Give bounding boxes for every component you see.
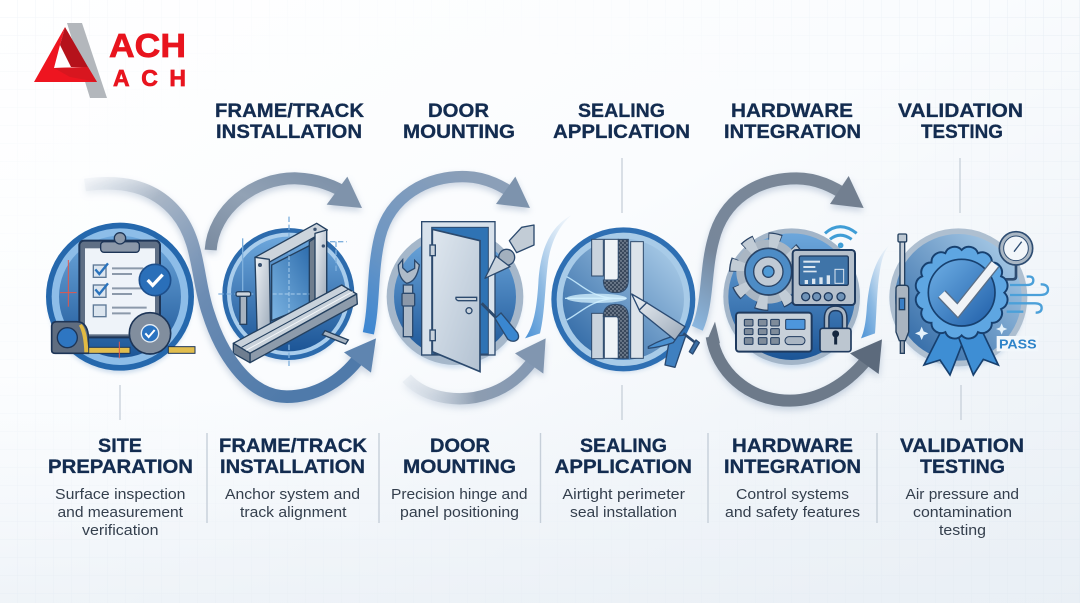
- description: contamination: [913, 505, 1012, 521]
- door frame: [422, 222, 495, 355]
- icon: frame and track: [218, 217, 357, 368]
- description: Surface inspection: [55, 487, 186, 503]
- arrow: frame top: [211, 177, 362, 250]
- heading: sealing application: SEALING: [578, 100, 665, 122]
- heading: sealing application: APPLICATION: [553, 121, 690, 143]
- heading: hardware integration: HARDWARE: [731, 100, 853, 122]
- column: validation testing: [900, 435, 1024, 539]
- heading: SITE: [98, 435, 142, 457]
- heading: [48, 435, 193, 478]
- heading: DOOR: [430, 435, 490, 457]
- icon: site preparation: [46, 223, 195, 373]
- logo: [34, 23, 186, 98]
- drill: [485, 225, 534, 278]
- probe: [896, 234, 909, 353]
- track: [233, 285, 357, 363]
- sealing channel: [592, 239, 643, 359]
- sparkles: [915, 323, 1007, 340]
- heading: MOUNTING: [403, 456, 516, 478]
- column: door mounting: [391, 435, 528, 521]
- airflow lines: [1007, 276, 1048, 313]
- description: [562, 487, 685, 521]
- heading: [554, 435, 692, 478]
- pass label: PASS: [999, 337, 1037, 352]
- arrow: frame to door: [368, 177, 530, 333]
- heading: validation testing: [898, 100, 1023, 143]
- logo wordmark: [109, 27, 186, 91]
- icon: hardware integration: [723, 227, 860, 368]
- control panel: [793, 250, 855, 305]
- swoosh: door to sealing: [525, 215, 572, 338]
- description: testing: [939, 523, 986, 539]
- description: verification: [82, 523, 158, 539]
- heading: validation testing: TESTING: [921, 121, 1003, 143]
- heading: door mounting: [403, 100, 515, 143]
- heading: door mounting: DOOR: [428, 100, 489, 122]
- heading: HARDWARE: [732, 435, 853, 457]
- airflow: [565, 277, 627, 320]
- heading: APPLICATION: [554, 456, 692, 478]
- swoosh: hardware to validation: [861, 245, 889, 338]
- description: and measurement: [58, 505, 183, 521]
- heading: FRAME/TRACK: [219, 435, 367, 457]
- description: track alignment: [240, 505, 346, 521]
- door panel: [432, 229, 480, 372]
- description: [225, 487, 360, 521]
- ribbons: [924, 330, 998, 375]
- arrow: door bottom: [407, 338, 546, 399]
- icon: validation testing: [889, 228, 1048, 375]
- column: frame/track installation: [219, 435, 367, 521]
- heading: frame/track: FRAME/TRACK: [215, 100, 364, 122]
- column dividers: [207, 433, 877, 523]
- description: seal installation: [570, 505, 677, 521]
- column: sealing application: [554, 435, 692, 521]
- heading: INSTALLATION: [220, 456, 365, 478]
- description: [391, 487, 528, 521]
- heading: [900, 435, 1024, 478]
- description: panel positioning: [400, 505, 519, 521]
- column: site preparation: [48, 435, 193, 539]
- top headings: [215, 100, 1023, 143]
- heading: validation testing: VALIDATION: [898, 100, 1023, 122]
- description: [55, 487, 186, 539]
- description: [906, 487, 1019, 539]
- bolts: [236, 292, 348, 344]
- padlock: [820, 308, 851, 352]
- heading: door mounting: MOUNTING: [403, 121, 515, 143]
- heading: VALIDATION: [900, 435, 1024, 457]
- heading: [219, 435, 367, 478]
- heading: hardware integration: [724, 100, 861, 143]
- description: and safety features: [725, 505, 860, 521]
- heading: TESTING: [920, 456, 1005, 478]
- heading: [403, 435, 516, 478]
- description: Precision hinge and: [391, 487, 528, 503]
- logo wordmark: ACH: [109, 27, 186, 64]
- rosette badge: [916, 247, 1008, 339]
- clipboard: [79, 233, 160, 337]
- keypad: [736, 313, 812, 352]
- gauge: [999, 232, 1033, 279]
- heading: PREPARATION: [48, 456, 193, 478]
- screwdriver: [482, 303, 519, 341]
- arrow: hardware bottom: [707, 322, 882, 401]
- wifi: [825, 227, 857, 247]
- check badge: [139, 264, 171, 296]
- connector stems: [120, 158, 961, 420]
- heading: frame/track: [215, 100, 364, 143]
- description: Anchor system and: [225, 487, 360, 503]
- icon: sealing application: [551, 227, 699, 373]
- frame: [255, 223, 327, 338]
- heading: frame/track: INSTALLATION: [216, 121, 362, 143]
- description: Control systems: [736, 487, 849, 503]
- description: [725, 487, 860, 521]
- description: Airtight perimeter: [562, 487, 685, 503]
- arrow: site to frame: [85, 183, 376, 397]
- heading: INTEGRATION: [724, 456, 861, 478]
- column: hardware integration: [724, 435, 861, 521]
- heading: SEALING: [580, 435, 667, 457]
- icon: door mounting: [387, 222, 534, 372]
- logo mark: [34, 23, 107, 98]
- gear: [738, 241, 799, 302]
- blueprint guides: [218, 217, 347, 368]
- arrow: sealing to hardware: [697, 176, 864, 328]
- caulk gun: [632, 294, 699, 367]
- heading: hardware integration: INTEGRATION: [724, 121, 861, 143]
- heading: [724, 435, 861, 478]
- tape measure: [52, 313, 195, 358]
- logo wordmark: ACH: [113, 65, 186, 91]
- description: Air pressure and: [906, 487, 1019, 503]
- hardware: [430, 245, 477, 341]
- wrench: [398, 260, 419, 337]
- heading: sealing application: [553, 100, 690, 143]
